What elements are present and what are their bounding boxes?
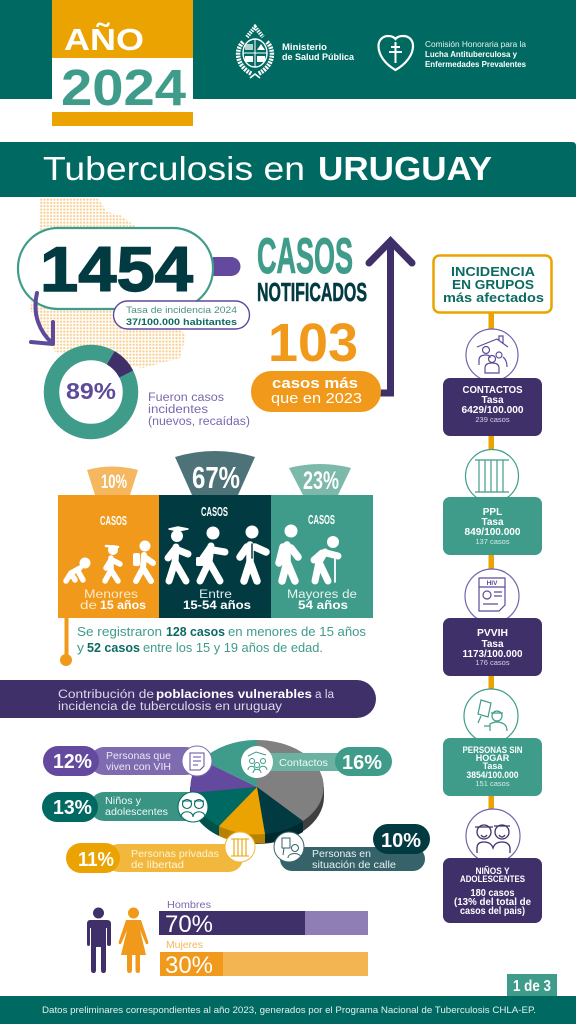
label: personas privadas de libertad 11%: de libertad	[131, 860, 184, 871]
group: PVVIH: 1173/100.000	[462, 649, 523, 660]
heading: incidencia en grupos: EN GRUPOS	[452, 277, 534, 292]
label: personas privadas de libertad 11%: 11%	[78, 849, 114, 871]
bar: mujeres 30%: 30%	[165, 952, 213, 979]
label: contactos 16%: 16%	[342, 752, 382, 774]
group: PVVIH: Tasa	[481, 639, 504, 650]
panel: entre 15-54 años: Entre	[199, 589, 232, 601]
heading: incidencia en grupos	[434, 256, 552, 312]
panel: entre 15-54 años: 15-54 años	[183, 600, 251, 612]
dotted map of Uruguay	[30, 198, 186, 368]
group: PVVIH	[443, 569, 542, 676]
footer: Datos preliminares correspondientes al año 2023, generados por el Programa Nacional de Tuberculosis CHLA-EP.	[42, 1005, 536, 1016]
page tag: 1 de 3	[513, 978, 551, 995]
page tag	[507, 974, 557, 996]
label: personas que viven con VIH 12%: Personas que	[106, 751, 171, 762]
group: niños y adolescentes: ADOLESCENTES	[460, 874, 525, 884]
label: contactos 16%: Contactos	[279, 758, 328, 769]
panel: entre 15-54 años	[159, 451, 271, 618]
footer	[0, 996, 576, 1024]
logo: Ministerio de Salud Pública: de Salud Pública	[282, 52, 355, 63]
group: personas sin hogar: PERSONAS SIN	[462, 745, 522, 755]
number: 103 more cases: que en 2023	[271, 391, 362, 407]
group: contactos: 239 casos	[475, 415, 510, 424]
group: PVVIH: HIV	[487, 580, 498, 587]
note: casos en menores: 52 casos	[87, 641, 140, 655]
header band	[0, 0, 576, 99]
group: contactos	[443, 329, 542, 436]
group: personas sin hogar	[443, 689, 542, 796]
icon: older adults	[279, 524, 339, 582]
year block	[52, 0, 193, 126]
label: personas privadas de libertad 11%	[66, 832, 255, 873]
label: niños y adolescentes 13%: 13%	[53, 797, 92, 819]
label: contactos 16%	[241, 746, 392, 778]
logo: Comisión Honoraria: Enfermedades Prevalentes	[425, 59, 526, 69]
group: personas sin hogar: 151 casos	[475, 779, 510, 788]
label: personas que viven con VIH 12%: viven con VIH	[106, 762, 171, 773]
group: personas sin hogar: Tasa	[483, 761, 503, 771]
group: PVVIH: 176 casos	[475, 658, 510, 667]
heading: casos notificados: NOTIFICADOS	[257, 277, 367, 307]
group: niños y adolescentes: (13% del total de	[454, 897, 531, 908]
icon: woman	[119, 908, 148, 973]
group: PVVIH: PVVIH	[477, 628, 508, 639]
note: casos en menores: 128 casos	[166, 625, 225, 639]
group: PPL: 849/100.000	[464, 527, 521, 538]
heading: casos notificados: CASOS	[257, 228, 353, 284]
group: contactos: CONTACTOS	[462, 385, 523, 396]
logo: Comisión Honoraria: Lucha Antituberculosa y	[425, 49, 517, 59]
group: PPL: PPL	[483, 507, 502, 518]
incidence rate pill: 37/100.000 habitantes	[126, 317, 237, 328]
logo: Comisión Honoraria	[378, 36, 526, 70]
group: niños y adolescentes: NIÑOS Y	[476, 866, 510, 876]
icon: two kids	[181, 800, 205, 817]
incidence rate pill	[114, 301, 250, 329]
heading: casos notificados	[257, 228, 367, 307]
note: casos en menores: entre los 15 y 19 años de edad.	[143, 641, 323, 655]
incidence rate pill: Tasa de incidencia 2024	[126, 305, 237, 316]
label: niños y adolescentes 13%	[42, 792, 208, 822]
total cases pill	[18, 228, 240, 309]
icon: HIV document	[190, 753, 204, 770]
group: contactos: Tasa	[481, 395, 504, 406]
icon: HIV form	[479, 578, 505, 611]
donut chart 89%: 89%	[66, 378, 116, 404]
logo: Comisión Honoraria: Comisión Honoraria para la	[425, 39, 526, 49]
panel: mayores de 54 años: 54 años	[298, 600, 348, 612]
heading: incidencia en grupos: más afectados	[443, 290, 544, 305]
label: personas en situación de calle 10%: situación de calle	[312, 860, 396, 871]
panel: mayores de 54 años	[271, 464, 373, 618]
icon: prison bars	[475, 460, 509, 492]
text: casos incidentes: (nuevos, recaídas)	[148, 416, 250, 428]
group: niños y adolescentes: casos del pais)	[460, 906, 525, 917]
icon: two children	[475, 825, 510, 853]
panel: menores de 15 años: 10%	[101, 472, 127, 493]
icon: baby and children	[66, 540, 153, 581]
note: casos en menores: Se registraron	[77, 625, 162, 639]
note: casos en menores: en menores de 15 años	[228, 625, 366, 639]
logo: Ministerio de Salud Pública	[238, 27, 355, 78]
heading band: poblaciones vulnerables: poblaciones vulnerables	[156, 689, 312, 701]
bar: hombres 70%: 70%	[165, 911, 213, 938]
3D pie chart	[190, 740, 324, 844]
heading band: poblaciones vulnerables: a la	[315, 689, 335, 701]
label: personas en situación de calle 10%: 10%	[381, 830, 421, 852]
donut chart 89%	[52, 352, 130, 432]
panel: menores de 15 años: de	[80, 600, 97, 612]
panel: menores de 15 años: Menores	[84, 589, 138, 601]
icon: man	[87, 908, 111, 973]
icon: bars	[231, 839, 249, 856]
heading: incidencia en grupos: INCIDENCIA	[451, 264, 536, 279]
number: 103 more cases	[251, 313, 381, 412]
label: personas en situación de calle 10%: Personas en	[312, 849, 371, 860]
label: personas que viven con VIH 12%: 12%	[53, 751, 92, 773]
label: personas en situación de calle 10%	[274, 824, 430, 871]
heading band: poblaciones vulnerables: Contribución de	[58, 689, 154, 701]
year block: AÑO	[64, 22, 144, 57]
group: personas sin hogar: HOGAR	[476, 753, 510, 763]
group: personas sin hogar: 3854/100.000	[466, 770, 518, 780]
panel: mayores de 54 años: 23%	[303, 467, 339, 495]
arrow: down to donut	[31, 293, 53, 344]
icon: person with sign	[478, 700, 507, 731]
number: 103 more cases: 103	[268, 313, 358, 373]
text: casos incidentes: incidentes	[148, 404, 208, 416]
group: niños y adolescentes	[443, 809, 542, 923]
group: contactos: 6429/100.000	[462, 405, 524, 416]
label: niños y adolescentes 13%: Niños y	[105, 796, 141, 807]
connector line	[488, 313, 494, 863]
note: casos en menores	[60, 618, 366, 666]
label: personas que viven con VIH 12%	[43, 746, 212, 776]
bar: hombres 70%	[159, 900, 368, 938]
logo: Ministerio de Salud Pública: Ministerio	[282, 42, 327, 53]
bar: mujeres 30%: Mujeres	[166, 940, 203, 951]
arrow: upward increase	[369, 240, 412, 393]
group: PPL	[443, 450, 542, 555]
icon: family house	[477, 336, 508, 373]
total cases pill: 1454	[40, 235, 193, 305]
heading band: poblaciones vulnerables	[0, 680, 376, 718]
panel: menores de 15 años: CASOS	[100, 513, 127, 528]
panel: mayores de 54 años: CASOS	[308, 512, 335, 527]
icon: family	[248, 752, 267, 773]
label: niños y adolescentes 13%: adolescentes	[105, 807, 168, 818]
group: PPL: Tasa	[481, 517, 504, 528]
label: personas privadas de libertad 11%: Personas privadas	[131, 849, 219, 860]
note: casos en menores: y	[77, 641, 85, 655]
bar: hombres 70%: Hombres	[167, 900, 211, 911]
title band	[0, 142, 576, 197]
number: 103 more cases: casos más	[272, 376, 358, 392]
panel: menores de 15 años	[58, 466, 159, 618]
title band: URUGUAY	[318, 150, 492, 187]
group: PPL: 137 casos	[475, 537, 510, 546]
heading band: poblaciones vulnerables: incidencia de tuberculosis en uruguay	[58, 701, 282, 713]
panel: menores de 15 años: 15 años	[100, 600, 146, 612]
bar: mujeres 30%	[160, 940, 368, 979]
panel: mayores de 54 años: Mayores de	[287, 589, 357, 601]
icon: homeless person	[282, 838, 301, 858]
panel: entre 15-54 años: CASOS	[201, 504, 228, 519]
title band: Tuberculosis en	[43, 150, 305, 187]
text: casos incidentes	[148, 392, 250, 428]
text: casos incidentes: Fueron casos	[148, 392, 224, 404]
group: niños y adolescentes: 180 casos	[470, 888, 515, 899]
icon: adults	[168, 526, 266, 581]
year block: 2024	[61, 59, 187, 116]
panel: entre 15-54 años: 67%	[192, 460, 240, 495]
